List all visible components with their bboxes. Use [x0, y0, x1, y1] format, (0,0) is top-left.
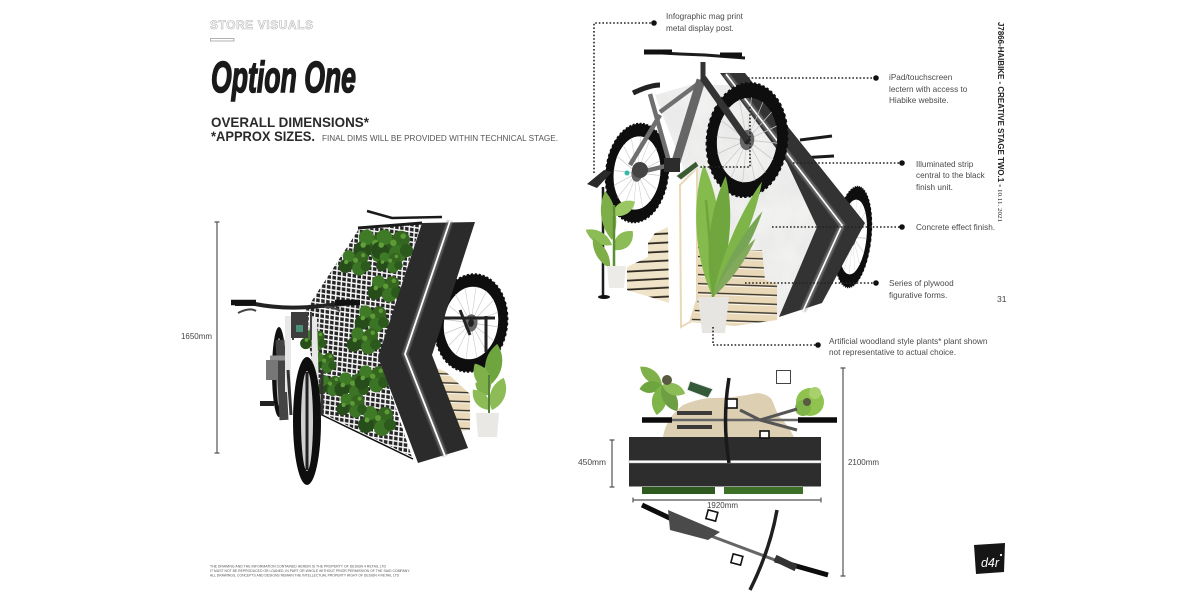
callout: ipad lectern: Hiabike website. [889, 96, 949, 105]
illustration: left front view of display unit with bike [231, 211, 513, 485]
illustration: top plan view [629, 362, 837, 590]
central plant [692, 164, 768, 299]
display post lectern [587, 170, 612, 299]
callout: plywood forms [745, 279, 954, 300]
heading: store visuals: STORE VISUALS [210, 18, 313, 32]
callout: concrete effect: Concrete effect finish. [916, 223, 995, 232]
callout: ipad lectern: iPad/touchscreen [889, 73, 953, 82]
dimension: 1650mm height [181, 222, 220, 453]
subheading: approx sizes: *APPROX SIZES. [211, 128, 315, 144]
mesh panel [303, 223, 422, 458]
plywood plan shape [663, 393, 794, 437]
display panel fin [680, 168, 697, 327]
panel top border [358, 223, 422, 228]
central plant pot [698, 297, 729, 333]
rear bike handlebar [800, 136, 834, 158]
illustration: right three quarter view of display unit [583, 52, 876, 333]
left plant [583, 190, 638, 271]
moss strip plan [642, 487, 803, 494]
logo: d4r [974, 543, 1005, 574]
vertical date: 10.11. 2021 [996, 189, 1003, 222]
callout: illuminated strip: finish unit. [916, 183, 953, 192]
lower bike plan [642, 505, 828, 590]
black chevron unit [720, 73, 865, 317]
dimension: 450mm [578, 440, 614, 487]
callout: artificial plants [713, 327, 988, 357]
left plant pot [607, 266, 626, 288]
right plant plan [795, 387, 824, 416]
concrete rear wall [655, 85, 817, 322]
subheading: overall dimensions: OVERALL DIMENSIONS* [211, 114, 370, 130]
callout: illuminated strip: Illuminated strip [916, 160, 974, 169]
legal footer: ALL DRAWINGS, CONCEPTS AND DESIGNS REMAIN THE INTELLECTUAL PROPERTY RIGHT OF DESIGN 4 RETAIL LTD [210, 572, 399, 578]
black chevron unit [378, 222, 475, 463]
callout: ipad lectern [748, 73, 968, 105]
callout: illuminated strip [700, 107, 986, 192]
black unit plan [629, 437, 821, 486]
plywood forms back block [627, 227, 669, 303]
bicycle [601, 52, 793, 225]
callout: infographic mag print: Infographic mag print [666, 12, 744, 21]
monstera plant [468, 342, 511, 415]
panel bottom border [320, 414, 413, 459]
left plant plan [636, 362, 687, 416]
rear bike frame parts [442, 310, 495, 352]
callout: ipad lectern: lectern with access to [889, 85, 968, 94]
dimension: 1920mm: 1920mm [707, 500, 738, 510]
legal footer: IT MUST NOT BE REPRODUCED OR LOANED, IN PART OR WHOLE WITHOUT PRIOR PERMISSION OF THE SAID COMPANY. [210, 568, 410, 573]
concrete texture [655, 85, 817, 322]
dimension: 2100mm: 2100mm [848, 457, 879, 467]
rear mounted bike wheel [429, 270, 513, 376]
title: option one: Option One [211, 53, 356, 102]
dimension: 1650mm height: 1650mm [181, 331, 212, 341]
dimension: 450mm: 450mm [578, 457, 606, 467]
lectern square plan [776, 370, 790, 384]
callout: plywood forms: Series of plywood [889, 279, 954, 288]
logo: d4r: d4r [981, 555, 1000, 570]
front bike [231, 302, 360, 485]
dimension: 1920mm [633, 498, 821, 510]
plywood forms front block [688, 222, 777, 326]
note: final dims: FINAL DIMS WILL BE PROVIDED WITHIN TECHNICAL STAGE. [322, 133, 558, 143]
legal footer: THE DRAWING AND THE INFORMATION CONTAINED HEREIN IS THE PROPERTY OF DESIGN 4 RETAIL LTD [210, 564, 386, 568]
illuminated strip [726, 74, 842, 311]
upper bike plan [642, 378, 837, 463]
heading underline box [210, 38, 234, 41]
illuminated strip [405, 221, 450, 456]
callout: concrete effect [772, 223, 995, 232]
callout: artificial plants: Artificial woodland style plants* plant shown [829, 337, 988, 346]
printed card on fin [676, 161, 699, 180]
callout: plywood forms: figurative forms. [889, 291, 947, 300]
vertical project reference: J7866-HAIBIKE - CREATIVE STAGE TWO.1 - [996, 22, 1006, 187]
plant pot [476, 413, 499, 437]
legal footer [210, 564, 410, 578]
callout: infographic mag print [594, 12, 744, 173]
rear bike top handlebar [367, 211, 442, 218]
plywood forms [434, 367, 470, 432]
page number: 31 [997, 294, 1007, 304]
moss clusters on mesh [300, 230, 413, 436]
callout: artificial plants: not representative to actual choice. [829, 348, 956, 357]
callout: infographic mag print: metal display post. [666, 24, 734, 33]
callout: illuminated strip: central to the black [916, 171, 986, 180]
rear bike wheel behind unit [830, 185, 876, 289]
dimension: 2100mm [840, 368, 879, 576]
printed card plan [687, 381, 713, 398]
